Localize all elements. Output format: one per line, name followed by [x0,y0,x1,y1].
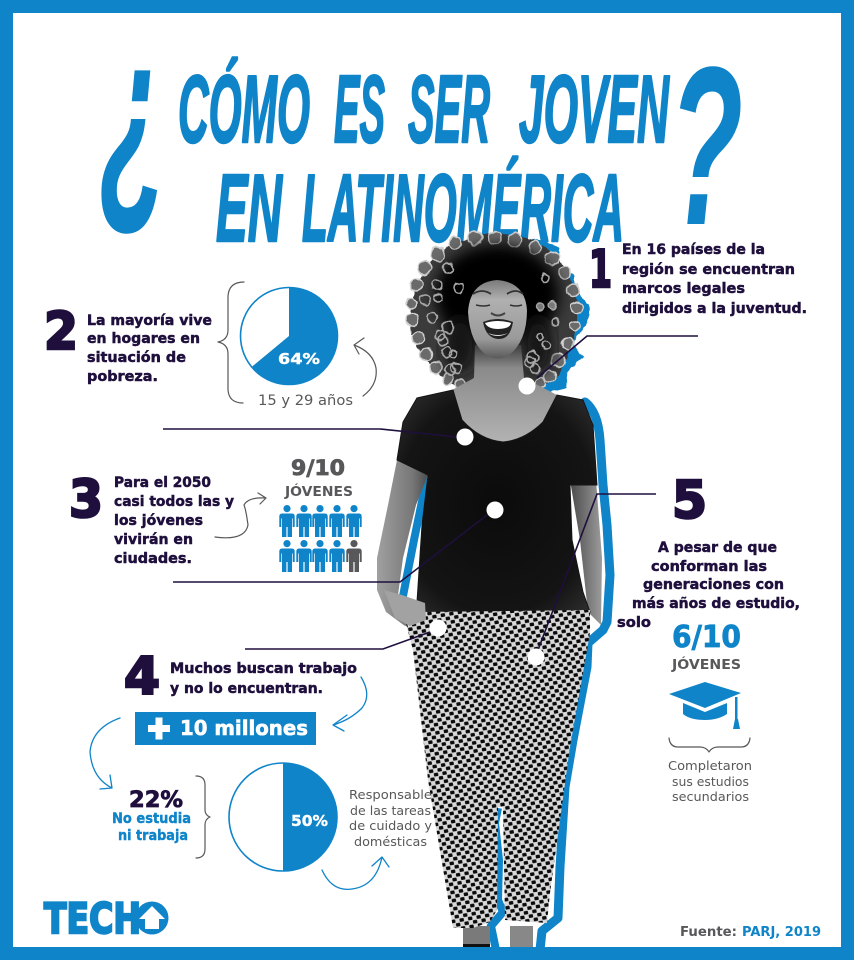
title: CÓMO [178,56,310,163]
number 4: 4 [124,647,160,707]
text block 4: y no lo encuentran. [170,681,323,697]
arrow from banner [90,718,120,789]
text block 5: solo [617,615,651,631]
text block 5: más años de estudio, [632,596,800,612]
age label: 15 y 29 años [258,393,353,409]
icon: graduation cap [669,682,741,729]
figure 9/10: 9/10 [291,456,345,480]
logo: TECHO: TECH [44,894,141,943]
text block 1: En 16 países de la [622,242,765,258]
legs below the hem [463,926,533,947]
woman photo illustration [377,231,610,950]
hair [406,231,583,389]
arrow: text to people [215,493,266,538]
hand in pocket [384,590,426,626]
figure 6/10: 6/10 [672,620,741,655]
connector dot 5 [528,648,544,666]
people pictogram [279,505,362,572]
banner +10 millones: 10 millones [180,716,308,740]
brace [218,282,244,403]
care tasks label: de cuidado y [349,818,433,833]
pie chart 50%: 50% [291,812,328,830]
title: ? [669,19,743,272]
title: ES [334,56,385,163]
text block 3 [114,475,235,567]
section 1 [589,240,807,317]
completed studies label [668,758,752,804]
text block 2: situación de [87,350,186,366]
patterned trousers [405,610,590,928]
text block 2 [87,313,212,385]
text block 3: vivirán en [114,532,193,548]
number 1: 1 [589,240,612,300]
section 5 [617,471,800,804]
number 5: 5 [672,471,707,531]
text block 5: conforman las [651,559,767,575]
label jóvenes: JÓVENES [671,657,741,673]
stat 22%: 22% [129,788,183,813]
text block 2: en hogares en [87,331,200,347]
completed studies label: secundarios [672,789,749,804]
stat 22%: ni trabaja [118,828,188,844]
source: PARJ, 2019 [742,925,821,940]
neck and chest [452,345,557,460]
blue outline behind figure [403,237,610,950]
text block 1 [622,242,807,317]
pie chart 64% [240,288,338,384]
text block 4: Muchos buscan trabajo [170,661,357,677]
text block 5: A pesar de que [658,540,777,556]
pie chart 64%: 64% [278,350,320,368]
care tasks label: Responsable [349,787,432,802]
completed studies label: sus estudios [672,774,749,789]
stat 22% [112,788,191,844]
title [100,0,743,272]
brace [196,776,210,858]
text block 3: casi todos las y [114,494,235,510]
connector dot 4 [430,620,446,636]
arrow to banner [333,677,367,731]
connector dot 3 [486,502,504,518]
arms [377,460,602,626]
label jóvenes: JÓVENES [284,484,353,500]
completed studies label: Completaron [668,758,752,773]
title: EN [216,155,283,262]
black t-shirt [397,390,597,616]
connector line 2 [163,429,457,437]
text block 5 [617,540,800,631]
text block 1: región se encuentran [622,262,795,278]
number 3: 3 [69,470,103,530]
number 2: 2 [44,302,78,362]
stat 22%: No estudia [112,811,191,827]
pie chart 50% [229,763,337,871]
text block 3: los jóvenes [114,513,203,529]
connector dot 2 [456,428,474,446]
banner +10 millones [135,712,316,745]
arrow to label [322,857,389,889]
connector line 5 [538,494,656,650]
face [468,280,527,358]
connector line 1 [537,336,698,378]
text block 3: Para el 2050 [114,475,211,491]
section 2 [44,282,376,409]
section 3 [69,456,362,572]
text block 2: La mayoría vive [87,313,212,329]
connector dot 1 [518,378,536,394]
text block 3: ciudades. [114,551,192,567]
section 4 [90,647,433,889]
text block 2: pobreza. [87,369,158,385]
title: JOVEN [519,56,670,163]
connector line 3 [173,515,487,582]
source [680,925,821,940]
brace [669,738,750,752]
text block 1: dirigidos a la juventud. [622,301,807,317]
source: Fuente: [680,925,737,940]
text block 1: marcos legales [622,281,745,297]
connector line 4 [245,632,430,649]
care tasks label [349,787,433,849]
care tasks label: domésticas [354,834,427,849]
arrow: age to pie [354,338,376,396]
text block 4 [170,661,357,697]
text block 5: generaciones con [643,577,784,593]
title: SER [408,56,490,163]
care tasks label: de las tareas [350,803,431,818]
